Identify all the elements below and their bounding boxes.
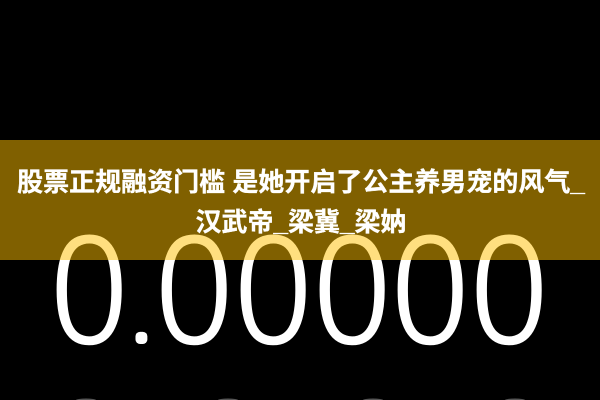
large number: 0.00000: 0: [391, 201, 469, 379]
translucent title band: [0, 140, 600, 260]
title: 股票正规融资门槛 是她开启了公主养男宠的风气_: [17, 167, 585, 197]
large number: 0.00000: 0: [234, 201, 312, 379]
large number: 0.00000: 0: [470, 201, 548, 379]
large number: 0.00000: 0: [313, 201, 391, 379]
large number: 0.00000: 0: [155, 201, 233, 379]
large number: 0.00000: .: [137, 314, 146, 346]
title: 汉武帝_梁冀_梁妠: [196, 207, 406, 237]
large number: 0.00000: 0: [50, 201, 128, 379]
title: [17, 167, 586, 237]
